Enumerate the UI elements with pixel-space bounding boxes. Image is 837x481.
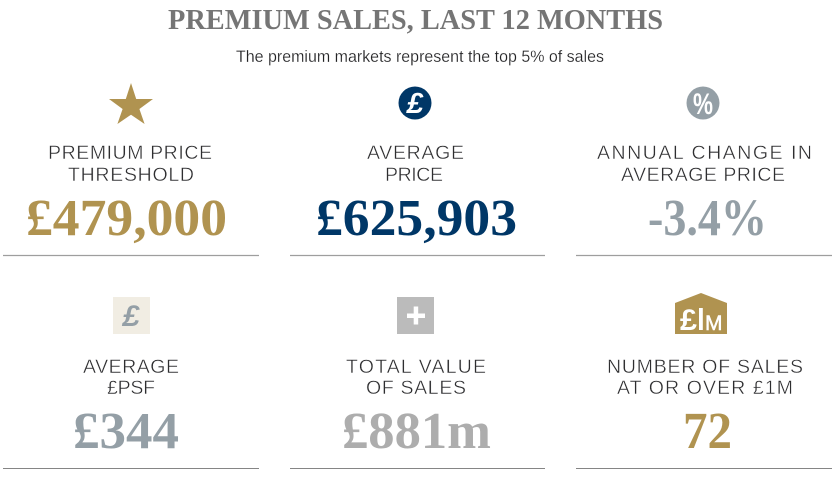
label: number of sales at or over £1m: NUMBER OF SALES [607,356,803,378]
value: £625,903: £625,903 [316,190,517,247]
label: number of sales at or over £1m [607,356,803,399]
panel: number of sales at or over £1m [576,293,832,468]
value: 72: 72 [683,403,732,460]
label: annual change in average price [597,142,812,186]
label: average price [367,142,464,186]
label: annual change in average price: AVERAGE PRICE [621,164,785,186]
icon: pound square: £ [122,300,141,333]
label: annual change in average price: ANNUAL CHANGE IN [597,142,812,164]
icon: navy pound circle [398,86,432,120]
label: premium price threshold: PREMIUM PRICE [48,142,212,164]
value: £344: £344 [73,403,179,460]
icon: navy pound circle: £ [406,88,424,120]
icon: pound square [113,297,150,334]
label: total value of sales: OF SALES [366,377,466,399]
label: average psf: AVERAGE [83,356,179,378]
icon: star [109,83,153,124]
label: average psf: £PSF [107,377,155,399]
value: -3.4%: -3.4% [648,190,767,247]
label: total value of sales: TOTAL VALUE [346,356,486,378]
label: premium price threshold: THRESHOLD [68,164,194,186]
panel: total value of sales [290,297,545,468]
panel: premium price threshold [3,83,259,256]
label: average price: AVERAGE [367,142,464,164]
label: total value of sales [346,356,486,399]
icon: house £1m [675,293,727,337]
subtitle: The premium markets represent the top 5% of sales [236,47,604,66]
value: £881m: £881m [342,403,491,460]
icon: percent circle: % [693,88,713,121]
icon: plus square [397,297,434,334]
icon: house £1m: £ [680,304,697,337]
label: average psf [83,356,179,399]
panel: average price [290,86,545,256]
title: PREMIUM SALES, LAST 12 MONTHS [168,4,663,36]
label: average price: PRICE [385,164,443,186]
panel: average psf [3,297,259,468]
label: premium price threshold [48,142,212,186]
label: number of sales at or over £1m: AT OR OVER £1M [617,377,793,399]
value: £479,000: £479,000 [26,190,227,247]
panel: annual change in average price [576,86,832,256]
icon: house £1m: M [705,312,722,335]
